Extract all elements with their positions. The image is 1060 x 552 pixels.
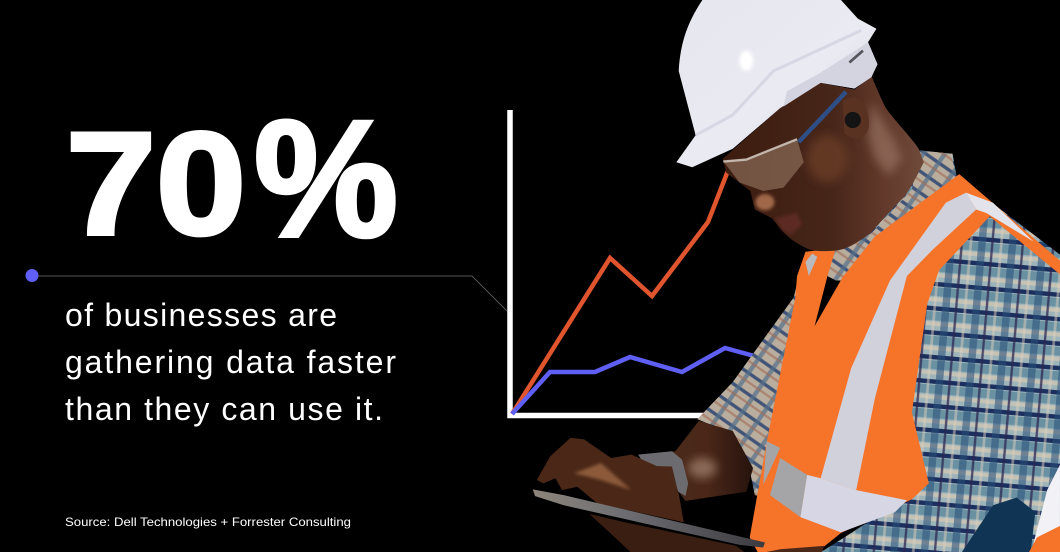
cheek highlight (807, 135, 848, 183)
reflective band gray left (763, 441, 807, 517)
description text: than they can use it. (65, 391, 383, 427)
description text: of businesses are (65, 297, 337, 333)
reflective stripe shoulder (966, 193, 1034, 242)
lower arm at bottom edge (746, 546, 824, 552)
neck and head (723, 76, 924, 251)
high-visibility vest (750, 174, 1060, 552)
lower hand (589, 514, 750, 552)
tablet (533, 489, 765, 548)
earbud (845, 112, 861, 128)
neck highlight (868, 101, 902, 176)
source note: Source: Dell Technologies + Forrester Consulting (65, 515, 351, 529)
collar (827, 150, 957, 281)
safety glasses (723, 92, 846, 191)
ear (843, 97, 869, 138)
wristwatch (638, 451, 688, 496)
left sleeve (697, 277, 800, 500)
right elbow patch (959, 498, 1035, 552)
hard hat (676, 0, 877, 167)
chart axes (510, 110, 720, 416)
description text (65, 297, 396, 427)
mouth (775, 213, 802, 235)
connector line with dot (26, 269, 507, 311)
big statistic: 70%: % (254, 87, 398, 272)
orange series (512, 168, 729, 414)
description text: gathering data faster (65, 344, 396, 380)
worker photo illustration (533, 0, 1060, 552)
vest main orange (750, 174, 1060, 552)
forearm highlight (688, 458, 717, 478)
nose highlight (755, 194, 774, 210)
forearm (638, 421, 753, 501)
reflective band horizontal (800, 475, 907, 532)
small stripe on strap (805, 254, 817, 276)
upper hand (537, 438, 684, 522)
plaid shirt torso and sleeve (817, 150, 1060, 552)
right vest fragment (1030, 465, 1060, 552)
finger highlights (574, 463, 631, 490)
line chart (510, 110, 758, 416)
blue series (512, 348, 758, 414)
reflective stripe diagonal (821, 193, 976, 490)
big statistic: 70%: 70 (66, 102, 246, 265)
big statistic: 70% (66, 87, 398, 272)
